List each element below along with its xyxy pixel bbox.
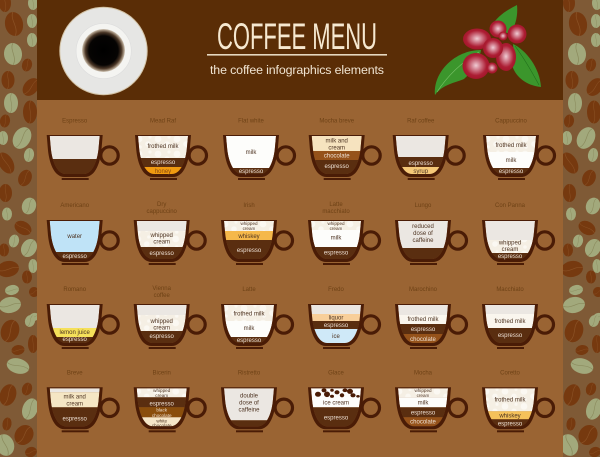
cup: Marochino: [395, 287, 466, 349]
cup: Latte macchiato: cream: [330, 226, 343, 231]
cup: Breve: Breve: [67, 371, 83, 377]
cup: Breve: milk and: [64, 394, 86, 400]
cup: Flat white: milk: [246, 150, 257, 156]
cup: Bicerin: chocolate: [152, 423, 172, 428]
cup: Con Panna: cream: [502, 247, 518, 253]
cup: Macchiato: frothed milk: [494, 319, 527, 325]
cup: Glace: [308, 371, 380, 432]
cup: Ristretto: caffeine: [239, 407, 260, 413]
cup: Espresso: [47, 119, 118, 180]
left bean strip: [0, 0, 37, 457]
cup: Irish: Irish: [243, 203, 255, 209]
cup: Cappuccino: Cappuccino: [495, 119, 528, 125]
cup: Con Panna: Con Panna: [495, 203, 526, 209]
cup: Marochino: Marochino: [409, 287, 438, 293]
cup: Latte macchiato: Latte: [329, 202, 343, 208]
cup: Espresso: Espresso: [62, 119, 88, 125]
cup: Americano: water: [66, 234, 82, 240]
cup: Latte macchiato: [308, 202, 380, 265]
cup: Latte macchiato: macchiato: [322, 209, 350, 215]
cup: Bicerin: black: [156, 407, 168, 412]
cup: Cappuccino: frothed milk: [495, 143, 528, 149]
cup: Mocha: espresso: [411, 410, 436, 416]
cup: Latte: frothed milk: [233, 312, 266, 318]
cup: Con Panna: [482, 203, 554, 265]
cup: Cappuccino: milk: [506, 158, 517, 164]
cup: Americano: Americano: [60, 203, 90, 209]
cup: Cappuccino: espresso: [499, 169, 524, 175]
cup: Dry cappuccino: cappuccino: [147, 209, 178, 215]
cup: Raf coffee: espresso: [409, 161, 434, 167]
cup: Latte: Latte: [242, 287, 256, 293]
cup: Americano: [47, 203, 118, 265]
cup: Vienna coffee: coffee: [154, 293, 170, 299]
cup: Mocha: chocolate: [410, 419, 437, 425]
cup: Cappuccino: [483, 119, 554, 180]
cup: Mocha: [395, 371, 466, 432]
cup: Bicerin: cream: [155, 393, 168, 398]
cup: Mead Raf: espresso: [151, 160, 176, 166]
cup: Flat white: [223, 119, 294, 180]
header band: [37, 0, 563, 100]
cup: Ristretto: Ristretto: [238, 371, 261, 377]
cup: Irish: [221, 203, 292, 265]
cup: Macchiato: Macchiato: [496, 287, 524, 293]
cup: Mead Raf: [135, 119, 206, 180]
cup: Flat white: Flat white: [238, 119, 264, 125]
cup: Americano: espresso: [63, 254, 88, 260]
cup: Mocha: Mocha: [414, 371, 433, 377]
cup: Fredo: liquor: [329, 316, 343, 322]
cup: Mocha breve: milk and: [326, 138, 348, 144]
cup: Fredo: ice: [332, 334, 340, 340]
cup: Lungo: [395, 203, 466, 265]
cup: Romano: Romano: [63, 287, 87, 293]
cup: Glace: ice cream: [323, 400, 349, 406]
cup: Mocha: milk: [418, 400, 429, 406]
cup: Latte: espresso: [237, 338, 262, 344]
cup: Lungo: Lungo: [415, 203, 432, 209]
cup: Latte macchiato: espresso: [324, 250, 349, 256]
cup: Mocha breve: chocolate: [324, 154, 350, 160]
cup: Glace: espresso: [324, 415, 349, 421]
cup: Vienna coffee: cream: [153, 326, 170, 332]
cup: Vienna coffee: [134, 286, 205, 349]
cup: Vienna coffee: Vienna: [152, 286, 172, 292]
cup: Latte: milk: [244, 326, 255, 332]
cup: Breve: espresso: [63, 416, 88, 422]
subtitle: the coffee infographics elements: [210, 63, 384, 77]
cup: Lungo: caffeine: [413, 238, 434, 244]
cup: Bicerin: espresso: [150, 401, 175, 407]
cup: Bicerin: Bicerin: [153, 371, 171, 377]
cup: Ristretto: double: [240, 393, 259, 399]
cup: Dry cappuccino: espresso: [150, 251, 175, 257]
cup: Ristretto: [221, 371, 292, 432]
cup: Romano: lemon juice: [60, 330, 91, 336]
cup: Breve: cream: [66, 401, 83, 407]
cup: Bicerin: chocolate: [152, 413, 172, 418]
icon: coffee cup from above: [60, 7, 147, 95]
cup: Irish: espresso: [237, 248, 262, 254]
cup: Latte macchiato: whipped: [327, 221, 345, 226]
cup: Bicerin: [134, 371, 205, 432]
cup: Con Panna: whipped: [498, 240, 521, 246]
cup: Fredo: espresso: [324, 323, 349, 329]
cup: Macchiato: espresso: [498, 333, 523, 339]
cup: Mocha breve: cream: [328, 146, 345, 152]
cup: Dry cappuccino: cream: [153, 240, 170, 246]
cup: Mocha breve: espresso: [325, 164, 350, 170]
cup: Marochino: espresso: [411, 327, 436, 333]
cup: Dry cappuccino: [134, 202, 205, 265]
cup: Macchiato: [482, 287, 554, 349]
cup: Lungo: reduced: [412, 224, 434, 230]
cup: Vienna coffee: espresso: [150, 334, 175, 340]
cup: Coretto: [482, 371, 554, 432]
cup: Coretto: Coretto: [500, 371, 520, 377]
cup: Bicerin: whipped: [153, 388, 171, 393]
cup: Fredo: [308, 287, 380, 349]
cup: Irish: cream: [243, 226, 256, 231]
cup: Vienna coffee: whipped: [150, 319, 173, 325]
coffee bean topping: [315, 388, 360, 398]
cup: Mocha: whipped: [414, 388, 432, 393]
cup: Romano: espresso: [63, 337, 88, 343]
cup: Irish: whipped: [240, 221, 258, 226]
cup: Ristretto: dose of: [239, 400, 259, 406]
cup: Marochino: chocolate: [410, 337, 437, 343]
cup: Mocha breve: Mocha breve: [319, 119, 355, 125]
cup: Raf coffee: syrup: [413, 169, 429, 175]
cup: Mead Raf: Mead Raf: [150, 119, 176, 125]
cup: Mocha: cream: [417, 393, 430, 398]
cup: Glace: Glace: [328, 371, 344, 377]
cup: Raf coffee: Raf coffee: [407, 119, 435, 125]
cup: Dry cappuccino: whipped: [150, 233, 173, 239]
title underline: [207, 54, 387, 56]
cup: Romano: [47, 287, 118, 349]
cup: Raf coffee: [393, 119, 464, 180]
cup: Bicerin: white: [156, 418, 168, 423]
cup: Dry cappuccino: Dry: [157, 202, 166, 208]
cup: Coretto: frothed milk: [494, 397, 527, 403]
cup: Mocha breve: [309, 119, 380, 180]
cup: Mead Raf: frothed milk: [147, 144, 180, 150]
cup: Flat white: espresso: [239, 169, 264, 175]
cup: Breve: [47, 371, 118, 432]
cup: Mead Raf: honey: [155, 169, 171, 175]
cup: Lungo: dose of: [413, 231, 433, 237]
title: COFFEE MENU: [217, 16, 377, 57]
cup: Fredo: Fredo: [328, 287, 344, 293]
cup: Latte: [221, 287, 292, 349]
cup: Irish: whiskey: [237, 234, 260, 240]
icon: coffee berries and leaves: [435, 5, 541, 95]
cup: Coretto: whiskey: [498, 413, 521, 419]
cup: Coretto: espresso: [498, 421, 523, 427]
cup: Latte macchiato: milk: [331, 236, 342, 242]
cup: Con Panna: espresso: [498, 254, 523, 260]
cup: Marochino: frothed milk: [407, 317, 440, 323]
right bean strip: [563, 0, 600, 457]
